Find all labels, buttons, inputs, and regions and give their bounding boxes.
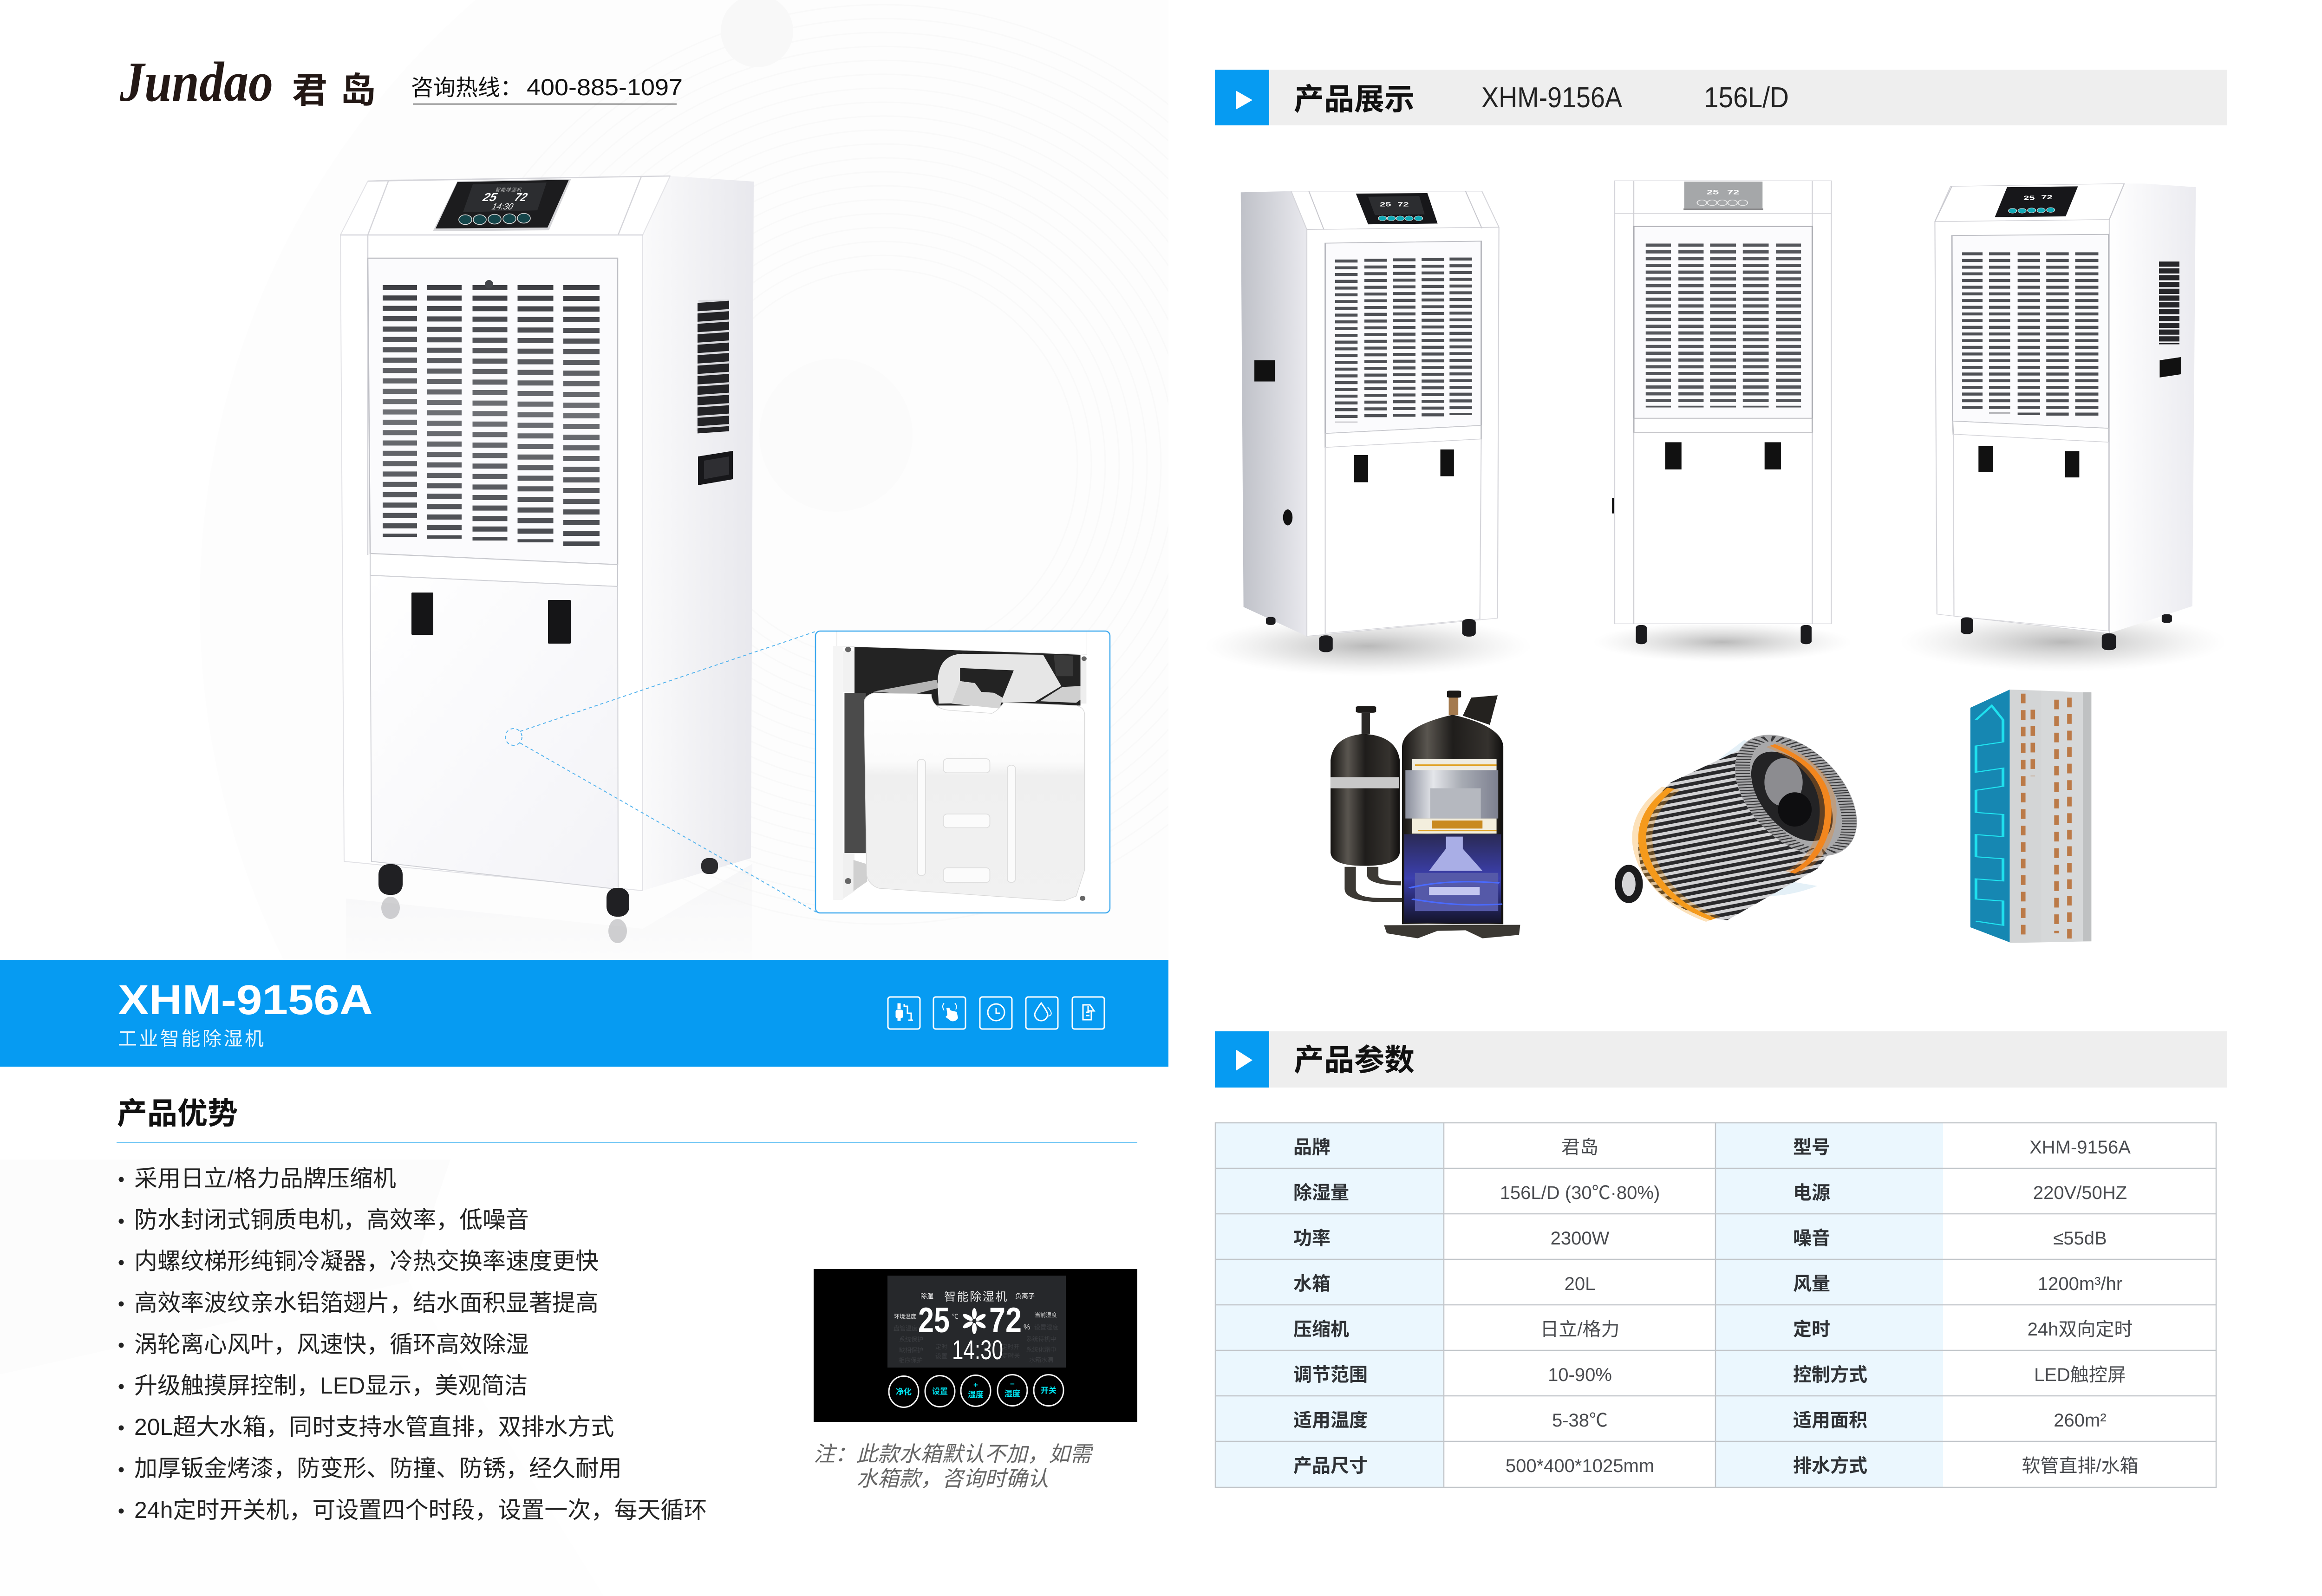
view: right angle: 72	[2041, 194, 2053, 201]
icon: document	[1072, 997, 1104, 1029]
table row: tank and airflow: 20L	[1565, 1274, 1595, 1294]
section bar: product showcase: 156L/D	[1704, 82, 1789, 114]
icon: water drops	[1026, 997, 1058, 1029]
LCD labels: 水箱水满	[1029, 1356, 1053, 1363]
table row: temperature and area: 适用温度	[1293, 1410, 1368, 1431]
hotline: 400-885-1097	[527, 74, 683, 100]
table row: compressor and timer: 24h双向定时	[2028, 1319, 2133, 1340]
blue title band	[0, 960, 1168, 1067]
section bar: product showcase	[1215, 70, 2227, 125]
table row: range and control: 控制方式	[1793, 1365, 1867, 1385]
side vent	[697, 300, 730, 432]
LCD labels: 定时	[935, 1343, 947, 1350]
section bar: product showcase: 产品展示	[1294, 82, 1415, 116]
view: left angle	[1241, 191, 1499, 652]
feature icons	[888, 997, 1104, 1029]
table row: brand and model: XHM-9156A	[2029, 1137, 2131, 1158]
touch buttons	[889, 1375, 1063, 1407]
LCD labels: 当前湿度	[1035, 1311, 1057, 1318]
table row: compressor and timer: 定时	[1793, 1319, 1830, 1340]
LCD screen	[887, 1276, 1066, 1368]
table row: compressor and timer	[1293, 1319, 2133, 1340]
note	[814, 1442, 1094, 1491]
display panel	[433, 179, 571, 231]
parameters table	[1215, 1123, 2216, 1487]
tank body	[864, 693, 1085, 901]
table row: tank and airflow: 风量	[1793, 1274, 1830, 1294]
icon: timer clock	[980, 997, 1012, 1029]
table row: brand and model: 品牌	[1293, 1137, 1331, 1158]
compressor	[1331, 691, 1520, 938]
background texture: lower left	[0, 1160, 604, 1596]
table row: size and drainage: 排水方式	[1793, 1456, 1867, 1476]
table row: range and control: 调节范围	[1293, 1365, 1368, 1385]
view: right angle	[1935, 183, 2196, 650]
table row: range and control: LED触控屏	[2034, 1365, 2126, 1385]
hotline: 咨询热线：	[411, 76, 522, 100]
table row: size and drainage: 产品尺寸	[1293, 1456, 1368, 1476]
band	[370, 554, 618, 586]
table row: compressor and timer: 压缩机	[1293, 1319, 1349, 1340]
LCD labels: 负离子	[1015, 1292, 1035, 1300]
tank opening	[874, 680, 939, 695]
LCD digits: 14:30	[952, 1335, 1003, 1365]
LCD digits: 25	[918, 1301, 950, 1340]
table row: tank and airflow: 水箱	[1293, 1274, 1331, 1294]
table row: temperature and area	[1293, 1410, 2107, 1431]
section bar: product parameters	[1215, 1031, 2227, 1088]
advantages list: 加厚钣金烤漆，防变形、防撞、防锈，经久耐用	[134, 1455, 622, 1481]
touch buttons: −	[1010, 1380, 1015, 1388]
turbo fan	[1615, 731, 1879, 920]
tank embossing	[917, 759, 1016, 882]
logo chinese name: 君岛	[292, 71, 389, 111]
logo	[119, 51, 389, 113]
LCD fan icon	[962, 1308, 987, 1334]
LCD labels: 环境温度	[894, 1313, 916, 1320]
table row: wattage and noise: ≤55dB	[2053, 1228, 2107, 1249]
touch buttons: 设置	[932, 1387, 948, 1396]
side handle	[698, 451, 733, 485]
label column backgrounds	[1215, 1123, 1943, 1487]
LCD labels: 定时开	[1001, 1343, 1020, 1350]
water tank callout panel	[815, 631, 1110, 913]
heading: product advantages: 产品优势	[117, 1096, 238, 1130]
LCD labels: ℃	[952, 1313, 959, 1320]
table row: size and drainage	[1293, 1456, 2139, 1476]
table row: temperature and area: 5-38℃	[1552, 1410, 1608, 1431]
door latches	[411, 593, 571, 644]
wheels	[378, 858, 718, 943]
table row: temperature and area: 260m²	[2054, 1410, 2107, 1431]
view: front: 72	[1727, 189, 1739, 196]
table row: wattage and noise: 噪音	[1793, 1228, 1830, 1249]
LCD labels: 定时关	[1002, 1352, 1020, 1359]
section bar: product parameters: 产品参数	[1294, 1043, 1415, 1077]
view: front: 25	[1707, 189, 1719, 196]
background texture: rings	[200, 0, 1797, 1402]
table row: tank and airflow: 1200m³/hr	[2038, 1274, 2122, 1294]
icon: pipe drainage	[888, 997, 920, 1029]
tank handle	[938, 654, 1061, 704]
advantages list: 采用日立/格力品牌压缩机	[134, 1166, 396, 1192]
hotline	[411, 74, 683, 104]
upper grille panel	[368, 258, 618, 565]
heading rule	[117, 1142, 1137, 1143]
table row: size and drainage: 软管直排/水箱	[2022, 1456, 2139, 1476]
table grid	[1215, 1123, 2216, 1487]
table row: range and control: 10-90%	[1548, 1365, 1612, 1385]
table row: brand and model	[1293, 1137, 2131, 1158]
LCD labels: 智能除湿机	[944, 1290, 1008, 1303]
cabinet opening	[854, 646, 1081, 705]
display panel: 智能除湿机	[495, 187, 523, 193]
note: 水箱款，咨询时确认	[856, 1466, 1049, 1491]
table row: tank and airflow	[1293, 1274, 2122, 1294]
table row: temperature and area: 适用面积	[1793, 1410, 1867, 1431]
LCD labels: 缺相保护	[899, 1347, 923, 1354]
shadows	[1205, 616, 1532, 676]
table row: wattage and noise: 功率	[1293, 1228, 1331, 1249]
LCD labels: 设置湿度	[1034, 1324, 1058, 1331]
LCD labels	[894, 1290, 1058, 1364]
view: left angle: 72	[1397, 201, 1409, 208]
advantages list	[119, 1166, 707, 1523]
water tank callout lines	[505, 631, 817, 912]
side face	[643, 176, 754, 891]
advantages list: 升级触摸屏控制，LED显示，美观简洁	[134, 1373, 528, 1399]
table row: brand and model: 君岛	[1561, 1137, 1598, 1158]
floor reflection	[346, 864, 752, 960]
LCD labels: 系统化霜中	[1026, 1346, 1057, 1353]
table row: compressor and timer: 日立/格力	[1540, 1319, 1620, 1340]
advantages list: 涡轮离心风叶，风速快，循环高效除湿	[134, 1331, 529, 1357]
touch buttons: 湿度	[1004, 1389, 1020, 1398]
component images	[1331, 690, 2091, 943]
LCD labels: %	[1024, 1323, 1030, 1331]
view: left angle: 25	[1380, 201, 1391, 208]
screws	[845, 647, 1087, 901]
LCD digits	[918, 1301, 1022, 1365]
icon: touch control	[933, 997, 965, 1029]
advantages list: 防水封闭式铜质电机，高效率，低噪音	[134, 1207, 529, 1233]
advantages list: 高效率波纹亲水铝箔翅片，结水面积显著提高	[134, 1290, 599, 1316]
LCD labels: 系统保护	[899, 1336, 923, 1343]
LCD digits: 72	[989, 1301, 1022, 1340]
model name: XHM-9156A	[118, 977, 373, 1023]
LCD labels: 设置	[935, 1353, 947, 1360]
note: 注：	[814, 1442, 856, 1466]
view: right angle: 25	[2023, 195, 2035, 201]
touch buttons: 开关	[1041, 1386, 1057, 1395]
table row: wattage and noise	[1293, 1228, 2107, 1249]
main product: dehumidifier	[340, 176, 754, 960]
table row: brand and model: 型号	[1793, 1137, 1830, 1158]
subtitle: 工业智能除湿机	[118, 1028, 266, 1049]
touch buttons: 净化	[896, 1387, 912, 1396]
front shell	[340, 176, 670, 891]
display panel: 25	[480, 190, 500, 204]
logo wordmark: Jundao	[119, 51, 273, 113]
display panel: 14:30	[490, 202, 515, 212]
table row: capacity and power: 156L/D (30℃·80%)	[1500, 1183, 1660, 1203]
top creases	[340, 176, 670, 555]
table row: capacity and power: 除湿量	[1293, 1183, 1349, 1203]
LCD labels: 相序保护	[899, 1357, 923, 1364]
LCD labels: 除湿	[920, 1292, 933, 1300]
table row: capacity and power	[1293, 1183, 2127, 1203]
view: front	[1612, 181, 1831, 644]
table row: capacity and power: 220V/50HZ	[2033, 1183, 2127, 1203]
LCD labels: 盘管温度	[894, 1325, 918, 1332]
condenser coil	[1970, 690, 2091, 943]
table row: size and drainage: 500*400*1025mm	[1506, 1456, 1654, 1476]
touch buttons: 湿度	[968, 1390, 984, 1399]
touch buttons: +	[973, 1381, 978, 1389]
table row: capacity and power: 电源	[1793, 1183, 1830, 1203]
product views	[1205, 181, 2226, 676]
advantages list: 24h定时开关机，可设置四个时段，设置一次，每天循环	[134, 1497, 707, 1523]
table row: range and control	[1293, 1365, 2126, 1385]
advantages list: 20L超大水箱，同时支持水管直排，双排水方式	[134, 1414, 614, 1440]
grille slats	[400, 285, 581, 546]
lower door	[370, 575, 618, 889]
section bar: product showcase: XHM-9156A	[1481, 82, 1623, 114]
control panel image	[814, 1269, 1137, 1422]
LCD labels: 系统待机中	[1026, 1335, 1057, 1342]
advantages list: 内螺纹梯形纯铜冷凝器，冷热交换率速度更快	[134, 1248, 599, 1274]
display panel: 72	[512, 190, 530, 204]
note: 此款水箱默认不加，如需	[856, 1442, 1094, 1466]
table row: wattage and noise: 2300W	[1551, 1228, 1610, 1249]
